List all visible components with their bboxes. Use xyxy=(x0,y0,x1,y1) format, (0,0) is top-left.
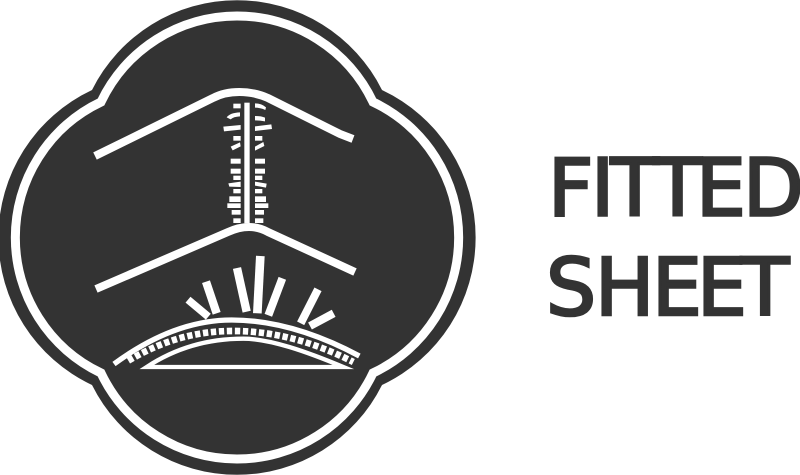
badge white ring xyxy=(15,16,459,459)
upper sheet corner line xyxy=(95,92,353,156)
elastic seam with stitches xyxy=(223,103,272,223)
title line 2: SHEET xyxy=(546,242,790,334)
title line 1: FITTED xyxy=(548,142,800,234)
outer arc xyxy=(114,320,359,364)
lower sheet corner line xyxy=(96,227,355,289)
inner arc and base xyxy=(147,339,343,367)
badge dark background xyxy=(0,0,476,475)
arc stitches xyxy=(128,331,353,362)
mattress corner with stitches and tension rays xyxy=(114,256,359,367)
title xyxy=(546,142,800,334)
tension rays xyxy=(188,256,334,326)
icon: quatrefoil badge xyxy=(0,0,476,475)
